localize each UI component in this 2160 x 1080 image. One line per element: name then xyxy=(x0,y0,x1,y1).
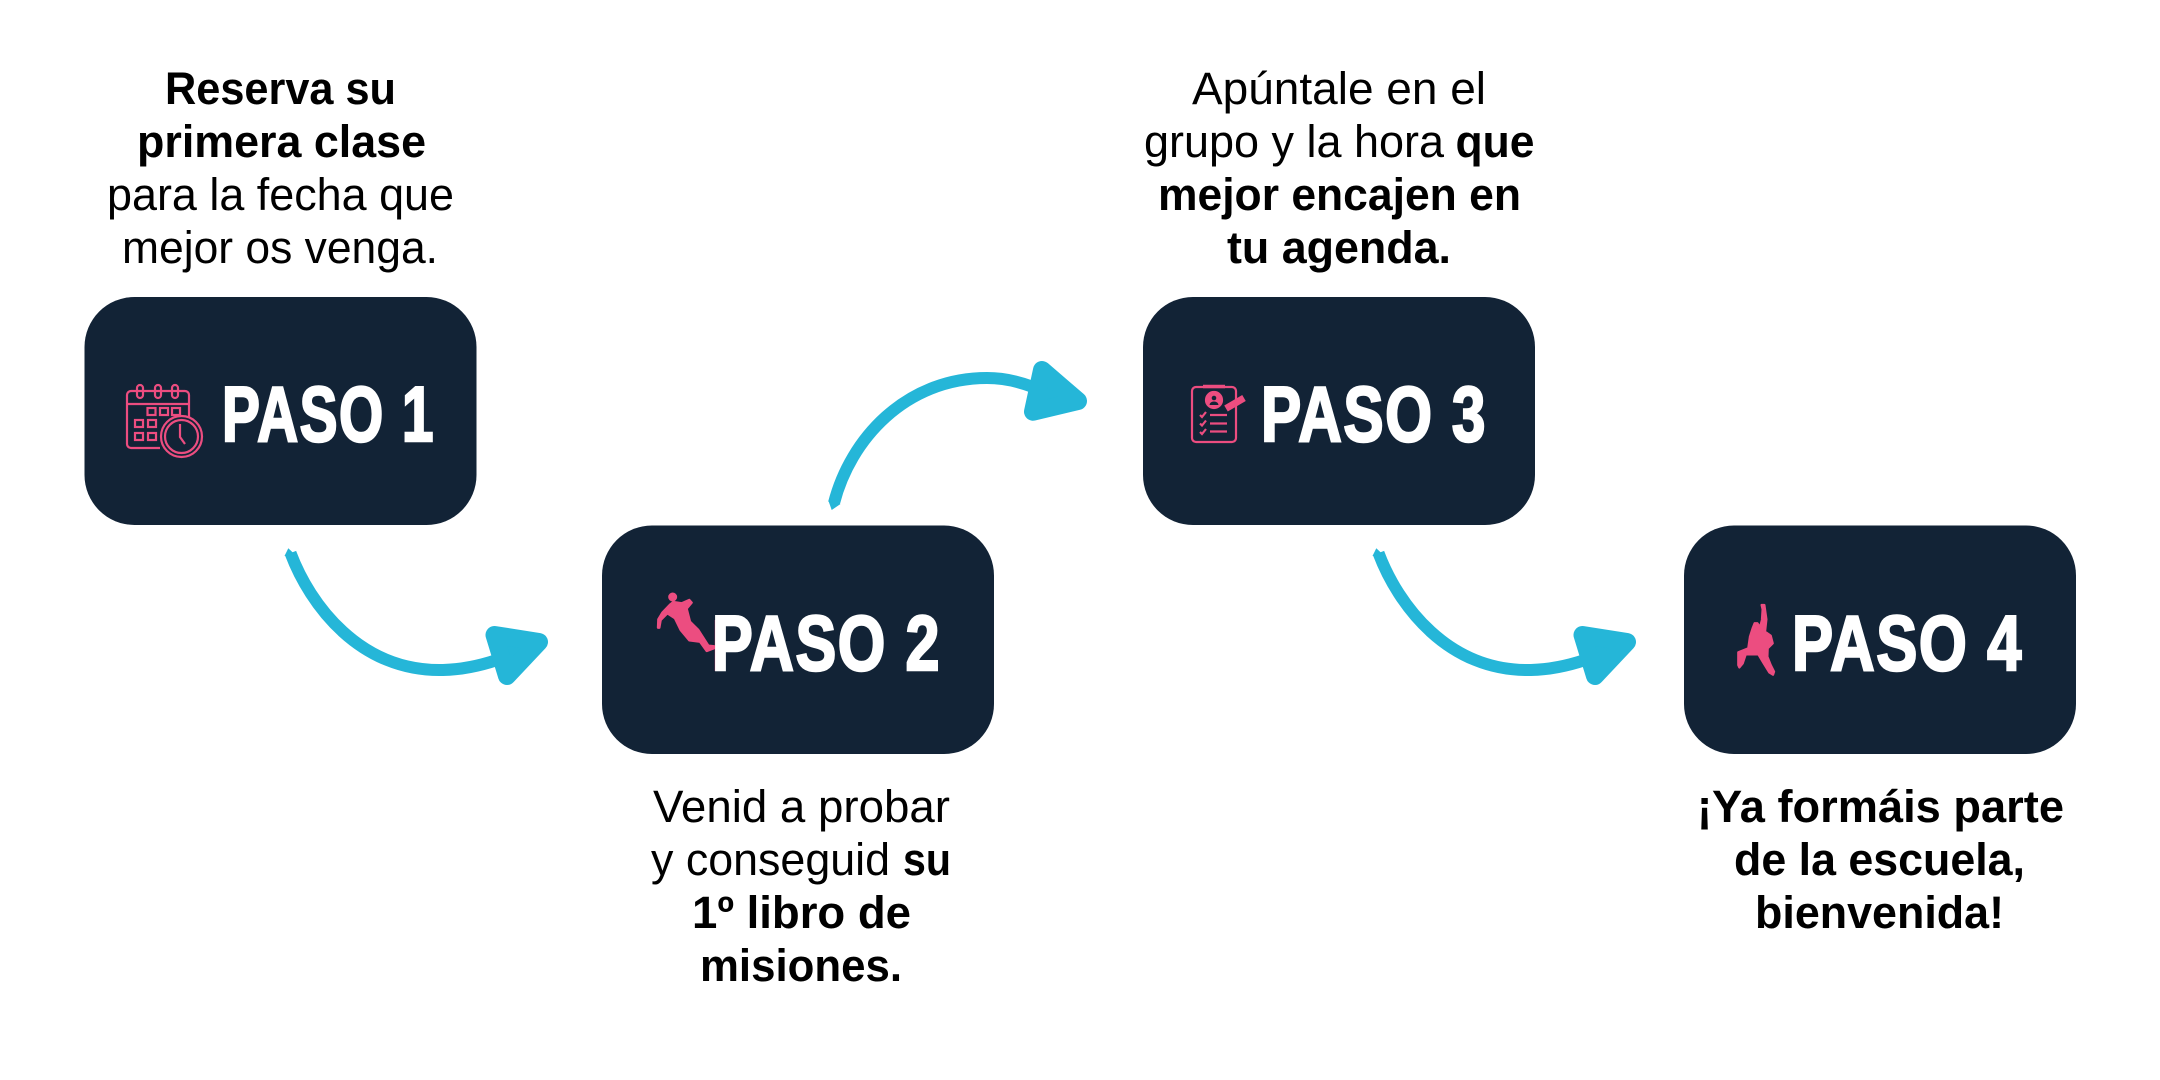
text block: step 1 xyxy=(107,63,454,273)
text block: step 2: Venid a probar xyxy=(653,781,950,832)
label: PASO 3: PASO 3 xyxy=(1261,370,1487,458)
icon: clipboard with checklist xyxy=(1192,386,1244,442)
text block: step 1: primera clase xyxy=(137,116,426,167)
text block: step 2 xyxy=(651,781,951,991)
panel: paso 2 xyxy=(602,526,994,754)
text block: step 3: que xyxy=(1456,116,1534,167)
text block: step 1: Reserva su xyxy=(165,63,396,114)
text block: step 3: Apúntale en el xyxy=(1192,63,1486,114)
text block: step 2: su xyxy=(903,834,951,885)
text block: step 2: misiones. xyxy=(700,940,902,991)
panel: paso 1 xyxy=(84,297,476,525)
icon: kicking figure xyxy=(658,594,714,651)
text block: step 3: tu agenda. xyxy=(1227,222,1451,273)
text block: step 2: 1º libro de xyxy=(692,887,911,938)
panel: paso 3 xyxy=(1143,297,1535,525)
text block: step 2: y conseguid xyxy=(651,834,890,885)
text block: step 3 xyxy=(1144,63,1534,273)
arrow: paso 2 to paso 3 xyxy=(828,370,1078,510)
icon: climbing figure xyxy=(1738,605,1774,675)
arrow: paso 1 to paso 2 xyxy=(284,548,539,676)
arrow: paso 3 to paso 4 xyxy=(1372,548,1627,676)
text block: step 3: mejor encajen en xyxy=(1158,169,1521,220)
text block: step 1: mejor os venga. xyxy=(122,222,438,273)
text block: step 4: ¡Ya formáis parte xyxy=(1697,781,2064,832)
label: PASO 2: PASO 2 xyxy=(712,599,941,687)
text block: step 1: para la fecha que xyxy=(107,169,454,220)
text block: step 4 xyxy=(1697,781,2064,938)
label: PASO 1: PASO 1 xyxy=(222,370,435,458)
accent: thin pink edge xyxy=(715,620,717,671)
icon: calendar with clock xyxy=(127,385,202,457)
text block: step 3: grupo y la hora xyxy=(1144,116,1445,167)
label: PASO 4: PASO 4 xyxy=(1792,599,2023,687)
text block: step 4: bienvenida! xyxy=(1755,887,2004,938)
panel: paso 4 xyxy=(1684,526,2076,754)
text block: step 4: de la escuela, xyxy=(1734,834,2025,885)
